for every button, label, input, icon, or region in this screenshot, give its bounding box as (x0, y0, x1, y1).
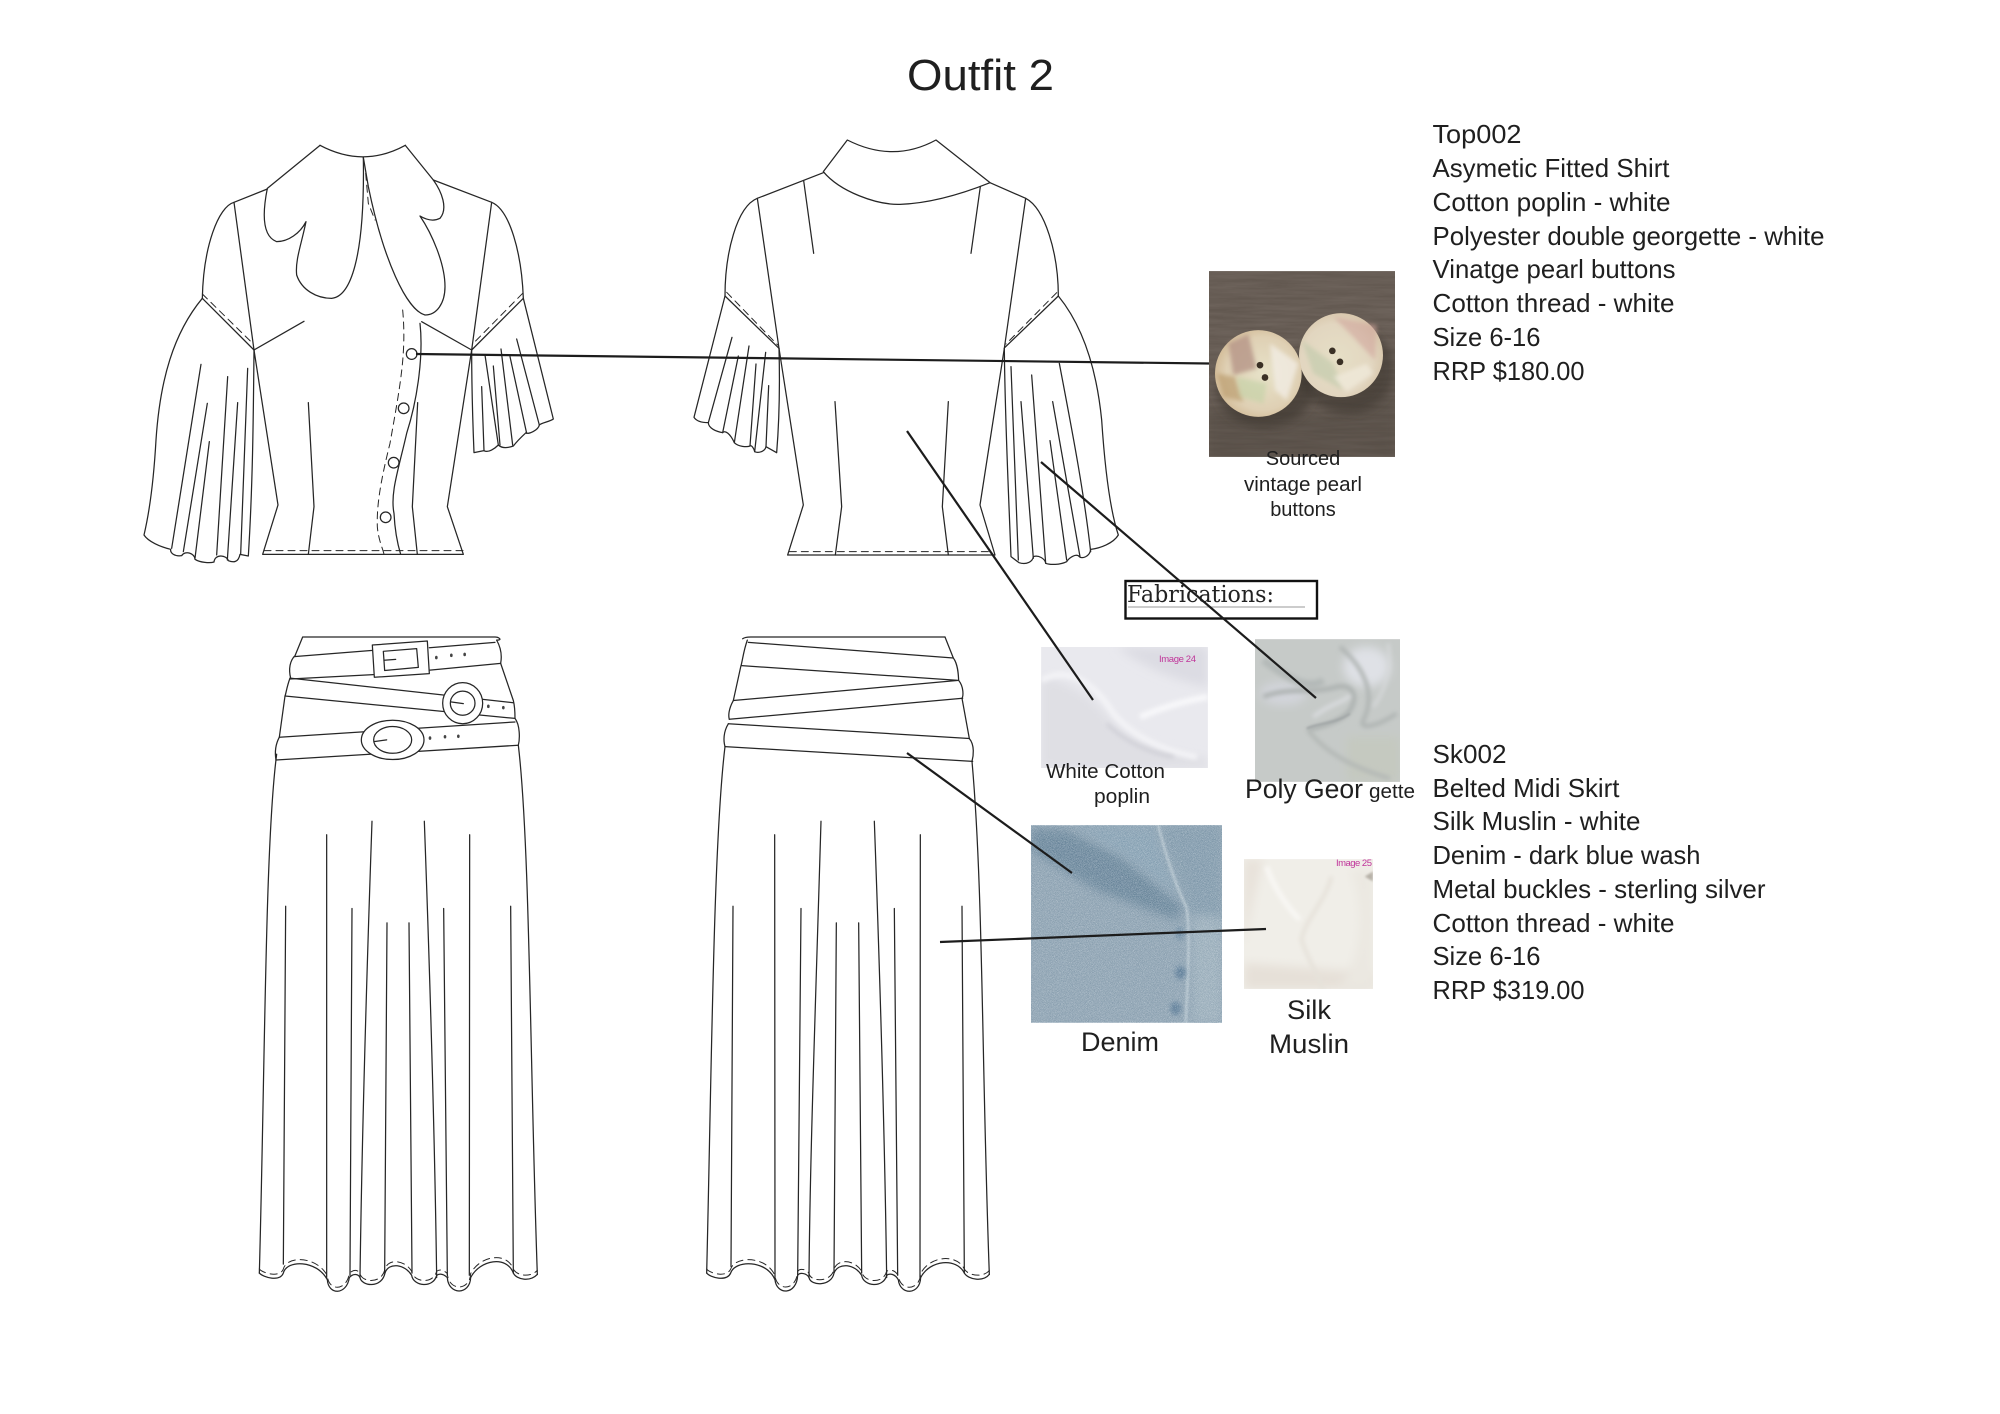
technical flat: skirt front (259, 637, 537, 1291)
callout line: skirt belt to denim (907, 753, 1072, 873)
caption: silk muslin: Muslin (1269, 1029, 1349, 1059)
caption: sourced vintage pearl buttons (1244, 448, 1362, 521)
spec text: skirt: RRP $319.00 (1432, 975, 1584, 1005)
caption: white cotton poplin: White Cotton (1046, 761, 1165, 783)
caption: silk muslin (1269, 995, 1349, 1059)
spec text: skirt: Metal buckles - sterling silver (1432, 874, 1766, 904)
spec text: top (1432, 119, 1824, 386)
caption: sourced vintage pearl buttons: vintage pearl (1244, 474, 1362, 496)
spec text: skirt (1432, 739, 1766, 1005)
technical flat: shirt back (694, 140, 1118, 564)
swatch watermark: Image 24: Image 24 (1159, 654, 1196, 665)
spec text: top: Polyester double georgette - white (1432, 221, 1824, 251)
callout line: skirt to silk muslin (940, 929, 1266, 942)
title: Outfit 2 (907, 51, 1054, 100)
caption: sourced vintage pearl buttons: buttons (1270, 499, 1336, 521)
callout line: shirt body to cotton poplin (907, 431, 1093, 700)
spec text: skirt: Denim - dark blue wash (1432, 840, 1700, 870)
caption: sourced vintage pearl buttons: Sourced (1266, 448, 1340, 470)
callout line: sleeve to georgette (1041, 462, 1316, 698)
callout line: button detail to pearl buttons (416, 354, 1209, 364)
caption: silk muslin: Silk (1287, 995, 1331, 1025)
swatch: silk muslin photo (1244, 859, 1373, 989)
swatch: vintage pearl buttons photo (1209, 271, 1395, 457)
swatch: white cotton poplin photo (1041, 647, 1208, 768)
technical flat: skirt back (707, 637, 989, 1291)
spec text: top: Asymetic Fitted Shirt (1432, 153, 1670, 183)
heading box: fabrications: Fabrications: (1127, 582, 1274, 608)
spec text: top: Cotton thread - white (1432, 288, 1674, 318)
spec text: skirt: Belted Midi Skirt (1432, 773, 1620, 803)
spec text: skirt: Cotton thread - white (1432, 908, 1674, 938)
caption: poly georgette: gette (1369, 781, 1415, 803)
spec text: top: Size 6-16 (1432, 322, 1540, 352)
spec text: top: Cotton poplin - white (1432, 187, 1670, 217)
spec text: top: Vinatge pearl buttons (1432, 254, 1676, 284)
caption: denim: Denim (1081, 1027, 1159, 1057)
swatch: polyester georgette photo (1255, 639, 1400, 782)
spec text: skirt: Sk002 (1432, 739, 1506, 769)
technical flat: shirt front (144, 145, 553, 563)
heading box: fabrications (1126, 581, 1317, 618)
swatch: denim photo (1031, 825, 1222, 1023)
caption: white cotton poplin: poplin (1094, 786, 1150, 808)
spec text: skirt: Silk Muslin - white (1432, 806, 1640, 836)
spec text: top: RRP $180.00 (1432, 356, 1584, 386)
caption: white cotton poplin (1046, 761, 1165, 808)
caption: poly georgette: Poly Geor (1245, 774, 1363, 804)
spec text: skirt: Size 6-16 (1432, 941, 1540, 971)
swatch watermark: Image 25: Image 25 (1336, 858, 1372, 869)
spec text: top: Top002 (1432, 119, 1522, 149)
